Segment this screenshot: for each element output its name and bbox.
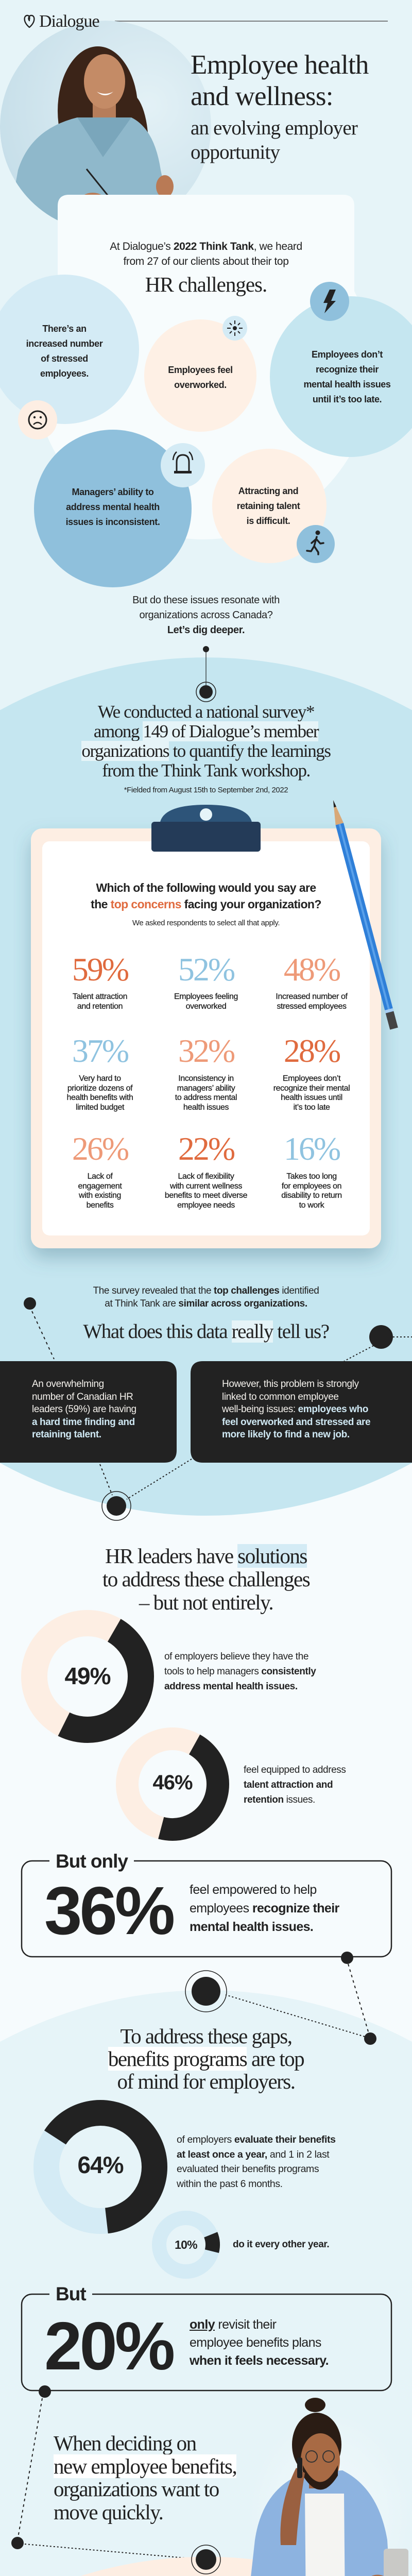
64% text [177,2134,336,2190]
stat 22: with current wellness [170,1182,242,1190]
heading: HR challenges: HR challenges. [145,273,267,296]
connectors section 2 [24,1297,412,1361]
stat 28: recognize their mental [273,1084,350,1092]
46% text: talent attraction and [244,1780,333,1790]
but label: But [56,2283,86,2304]
man photo [247,2398,412,2576]
title: Employee health [191,50,369,80]
connector 1 [196,646,216,702]
36% text [190,1883,339,1934]
clipboard [31,805,381,1248]
box 20 [22,2294,391,2391]
heading: move quickly [54,2431,236,2524]
20% text: employee benefits plans [190,2335,321,2350]
bubble text: stressed: of stressed [41,353,88,364]
36% text: employees recognize their [190,1901,339,1916]
bubble text: managers: Managers’ ability to [72,487,154,497]
stat 32: 32% [178,1032,234,1069]
stat 26: benefits [87,1200,113,1210]
10% value: 10% [175,2238,197,2251]
heading: move quickly: new employee benefits, [54,2454,236,2478]
bubble text: stressed: employees. [40,368,89,379]
stat 32: Inconsistency in [178,1074,234,1083]
stat 37: 37% [72,1032,128,1069]
bubble text: stressed: increased number [26,338,102,349]
bubble text: recognize [303,349,391,404]
heading: move quickly: move quickly. [54,2500,163,2523]
survey conclusion: at Think Tank are similar across organizations. [105,1298,307,1309]
bubble text: managers: address mental health [66,502,160,512]
heading: benefits programs [108,2024,304,2093]
46% text: feel equipped to address [244,1765,346,1775]
title [191,50,369,111]
intro text: from 27 of our clients about their top [124,256,288,267]
stat 16: 16% [284,1130,339,1167]
icon: bell [161,443,205,487]
subtitle [191,117,358,163]
bubble text: overworked: overworked. [174,380,227,390]
transition text: But do these issues resonate with [132,595,280,606]
stat 37: limited budget [76,1103,124,1112]
stat 37: health benefits with [67,1093,133,1102]
stat 26: Lack of [88,1172,112,1181]
heading: move quickly: When deciding on [54,2431,196,2455]
connectors 3 [185,1952,376,2045]
title: and wellness: [191,81,333,111]
stat 59: Talent attraction [73,992,127,1001]
stat 52 [174,951,238,1011]
stat 22 [165,1130,247,1210]
stat 28: Employees don’t [283,1074,340,1083]
donut 49 [15,1604,160,1749]
dark box right text: feel overworked and stressed are [222,1417,370,1427]
dark box right text: well-being issues: employees who [222,1404,368,1415]
bubble text: stressed: There’s an [42,324,87,334]
stat 48 [276,951,348,1011]
stat 32: to address mental [175,1093,237,1102]
icon: lightning [310,282,349,321]
heading: solutions: – but not entirely. [139,1590,273,1614]
heading: benefits programs: benefits programs are top [108,2047,304,2071]
49% text: address mental health issues. [164,1681,298,1692]
subtitle: an evolving employer [191,117,357,139]
stat 52: 52% [178,951,234,988]
stat 37: Very hard to [79,1074,121,1083]
heading: benefits programs: To address these gaps, [120,2024,292,2048]
heading: solutions: to address these challenges [102,1567,310,1591]
stat 26: with existing [79,1191,121,1200]
bubble text: talent [237,486,300,526]
bubble text: recognize: recognize their [316,364,379,375]
20% value: 20% [44,2308,173,2384]
pencil [329,799,398,1030]
stat 48: stressed employees [277,1002,347,1011]
bubble text: talent: is difficult. [247,516,290,526]
dark box left text: An overwhelming [32,1379,104,1389]
dark box left text: a hard time finding and [32,1417,135,1427]
stat 26 [72,1130,128,1210]
36% text: feel empowered to help [190,1883,317,1897]
heading: benefits programs: of mind for employers. [117,2070,295,2093]
stat 59: and retention [77,1002,123,1011]
icon: frown [18,400,57,439]
bubble text: managers: issues is inconsistent. [66,517,160,527]
question: Which of the following would you say are [96,881,316,894]
stat 59 [72,951,128,1011]
stat 16 [281,1130,342,1210]
footnote: *Fielded from August 15th to September 2nd, 2022 [124,786,288,794]
dark box right text: linked to common employee [222,1391,339,1402]
64% text: at least once a year, and 1 in 2 last [177,2148,329,2160]
heading: solutions [102,1544,310,1614]
survey heading: We conducted a national survey* [98,702,314,722]
transition text: organizations across Canada? [140,609,272,621]
donut 10 [151,2210,221,2280]
dark box left text: retaining talent. [32,1429,101,1440]
subtitle: opportunity [191,141,280,163]
bubble text: talent: Attracting and [238,486,298,496]
heading: move quickly: organizations want to [54,2477,219,2501]
bubble text: overworked [168,365,233,390]
46% text [244,1765,346,1805]
survey conclusion [93,1285,319,1309]
dark box left text [32,1379,136,1440]
stat 22: Lack of flexibility [178,1172,234,1181]
64% value: 64% [77,2151,124,2178]
logo header: Dialogue [39,12,99,31]
stat 16: to work [299,1200,324,1210]
survey conclusion: The survey revealed that the top challenges identified [93,1285,319,1296]
transition text: Let’s dig deeper. [167,624,245,636]
stat 26: engagement [78,1182,122,1190]
stat 26: 26% [72,1130,128,1167]
survey heading: among 149 of Dialogue’s member [94,721,318,741]
46% text: retention issues. [244,1794,315,1805]
dark box right text: more likely to find a new job. [222,1429,350,1440]
stat 22: 22% [178,1130,234,1167]
bubble text: stressed [26,324,103,379]
49% text: tools to help managers consistently [164,1666,316,1677]
icon: sparkle [222,316,247,341]
donut 64 [26,2092,175,2242]
intro text [110,241,302,267]
stat 28: it’s too late [294,1103,330,1112]
stat 28: 28% [284,1032,339,1069]
transition text [132,595,280,636]
peach dome [0,2557,412,2576]
49% text [164,1651,316,1692]
stat 52: overworked [186,1002,226,1011]
stat 22: benefits to meet diverse [165,1191,247,1200]
but only label: But only [56,1851,128,1872]
stat 16: for employees on [282,1182,341,1190]
intro text: At Dialogue’s 2022 Think Tank, we heard [110,241,302,252]
stat 28: health issues until [281,1093,342,1102]
stat 32: managers’ ability [177,1084,235,1092]
survey heading [81,702,331,781]
stat 16: Takes too long [286,1172,337,1181]
stat 32 [175,1032,237,1112]
but label [49,2283,92,2305]
ring 4 [192,2545,220,2574]
woman photo [0,21,211,232]
heading: what does data tell: What does this data really tell us? [83,1320,329,1343]
stat 28 [273,1032,350,1112]
stat 22: employee needs [177,1200,235,1210]
20% text: when it feels necessary. [190,2353,329,2368]
49% value: 49% [64,1663,111,1689]
dark boxes [0,1361,177,1463]
donut 46 [111,1722,234,1846]
connectors 4 [11,2385,192,2558]
64% text: of employers evaluate their benefits [177,2134,336,2145]
20% text: only revisit their [190,2317,276,2332]
survey heading: from the Think Tank workshop. [102,760,310,781]
bubble text: recognize: Employees don’t [312,349,383,360]
question note: We asked respondents to select all that apply. [132,919,280,927]
bubble text: overworked: Employees feel [168,365,233,375]
heading: solutions: HR leaders have solutions [105,1544,307,1568]
bubble text: managers [66,487,160,527]
ring 2 [100,1459,192,1520]
bubbles [0,275,139,424]
36% value: 36% [44,1873,173,1948]
dark box left text: number of Canadian HR [32,1391,133,1402]
bubble text: recognize: until it’s too late. [313,394,382,404]
bubble text: talent: retaining talent [237,501,300,511]
dark box left text: leaders (59%) are having [32,1404,136,1415]
46% value: 46% [152,1771,193,1794]
header line [115,21,388,22]
20% text [190,2317,329,2368]
stat 52: Employees feeling [174,992,238,1001]
dark box right text [222,1379,370,1440]
stat 48: 48% [284,951,339,988]
stat 37: prioritize dozens of [67,1084,132,1092]
survey heading: organizations to quantify the learnings [81,741,331,761]
question [91,881,321,911]
stat 32: health issues [183,1103,229,1112]
bubble text: recognize: mental health issues [303,379,391,389]
icon: runner [297,525,335,563]
49% text: of employers believe they have the [164,1651,308,1662]
white panel [58,195,354,428]
question: the top concerns facing your organization? [91,897,321,911]
36% text: mental health issues. [190,1920,313,1934]
dark box right text: However, this problem is strongly [222,1379,359,1389]
stat 16: disability to return [281,1191,342,1200]
64% text: evaluated their benefits programs [177,2163,319,2175]
10% text: do it every other year. [233,2239,329,2250]
box 36 [22,1861,391,1957]
stat 48: Increased number of [276,992,348,1001]
64% text: within the past 6 months. [177,2178,283,2190]
stat 59: 59% [72,951,128,988]
stat 37 [67,1032,133,1112]
stat grid [67,951,350,1210]
